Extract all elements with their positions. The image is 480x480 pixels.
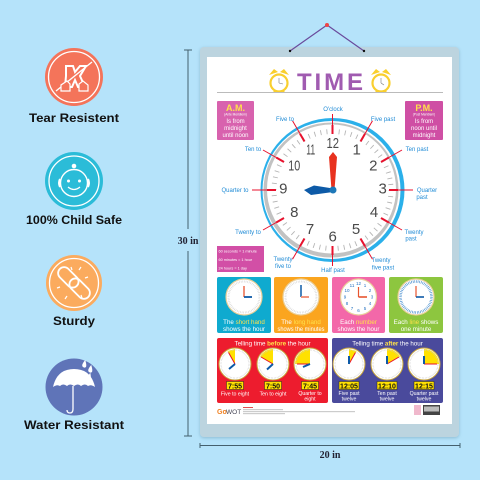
panel: A.M.: midnight (224, 126, 247, 132)
clock labels: Ten past (406, 147, 429, 153)
panel: time conversions: 60 minutes = 1 hour (218, 258, 253, 262)
card: each line: one minute (401, 326, 432, 333)
footer: logo and imprint: Go (217, 409, 227, 416)
panel: A.M.: (Ante Meridiem) (224, 112, 247, 116)
panel: telling time before the hour (217, 338, 328, 403)
clock labels: past (405, 236, 417, 242)
panel: P.M.: midnight (413, 133, 436, 139)
title: TIME (297, 69, 363, 96)
clock labels: Five past (371, 117, 396, 123)
card: each line (389, 277, 443, 333)
panel: time conversions: 24 hours = 1 day (218, 266, 247, 270)
clock labels: Half past (321, 268, 345, 274)
card: short hand: The short hand (223, 319, 265, 326)
clock 12:05 (333, 348, 365, 402)
hanging cord (289, 23, 365, 52)
clock 7:55: 7:55 (228, 383, 242, 390)
clock labels: Quarter to (221, 188, 249, 194)
card: each line: Each line shows (394, 319, 438, 326)
footer: qr and barcode (414, 405, 440, 415)
clock labels: Twenty (273, 257, 293, 263)
clock 12:05: twelve (342, 396, 356, 402)
dimension: width 20 in: 20 in (320, 450, 341, 461)
icon: sturdy (46, 255, 102, 311)
icon: child safe (45, 152, 103, 210)
panel: A.M.: Is from (226, 119, 245, 125)
minute hand (329, 152, 337, 190)
panel: telling time after the hour (332, 338, 443, 403)
clock labels: five past (372, 266, 394, 272)
clock labels: Twenty to (235, 230, 261, 236)
main clock (252, 114, 413, 266)
clock 7:45 (294, 348, 326, 402)
clock 7:55: Five to eight (221, 392, 250, 398)
panel: A.M.: A.M. (226, 103, 245, 113)
card: each number: 6 (357, 308, 360, 313)
card: each number: 9 (344, 294, 347, 300)
panel: A.M.: until noon (222, 133, 249, 139)
clock numerals: 1 (353, 142, 361, 158)
clock 12:10 (371, 348, 403, 402)
label: tear resistent: Tear Resistent (29, 111, 119, 125)
clock numerals: 2 (369, 158, 377, 174)
clock numerals: 8 (290, 204, 298, 221)
clock numerals: 5 (352, 221, 360, 238)
card: short hand (217, 277, 271, 333)
clock labels: Five to (276, 117, 295, 123)
clock 12:05: 12:05 (340, 383, 358, 390)
card: long hand (274, 277, 328, 333)
red hour marks (252, 114, 413, 266)
dimension: height 30 in (178, 50, 199, 436)
clock 12:15 (408, 348, 440, 402)
card: each number: 12 (356, 281, 361, 286)
pivot (330, 186, 336, 194)
clock numerals: 7 (306, 221, 314, 238)
panel: P.M.: noon until (411, 126, 437, 132)
hour hand (304, 186, 333, 195)
label: child safe: 100% Child Safe (26, 213, 122, 227)
label: water resistant: Water Resistant (24, 418, 124, 432)
card: each number: 10 (344, 288, 350, 293)
card: each number: Each number (340, 319, 377, 326)
clock 7:50 (257, 348, 289, 398)
clock 12:10: Ten past (377, 391, 397, 397)
clock numerals: 11 (306, 142, 315, 158)
card: each number: 7 (351, 306, 354, 311)
clock labels: past (416, 195, 428, 201)
icon: water resistant (46, 358, 102, 416)
card: long hand: The long hand (281, 319, 321, 326)
clock numerals: 3 (379, 181, 387, 198)
card: each number: 4 (369, 301, 372, 306)
panel: telling time before the hour: Telling time before the hour (234, 340, 311, 348)
card: each number: 5 (364, 306, 367, 311)
clock 7:55 (219, 348, 251, 398)
footer: logo and imprint: WOT (226, 409, 241, 416)
clock numerals: 4 (370, 204, 378, 221)
panel: P.M.: P.M. (415, 103, 433, 113)
dimension: height 30 in: 30 in (178, 236, 199, 247)
clock 12:05: Five past (338, 391, 360, 397)
poster frame (200, 47, 459, 437)
clock labels: O'clock (323, 107, 344, 113)
card: each number: 11 (350, 283, 355, 288)
clock numerals (279, 135, 387, 246)
clock labels: five to (275, 264, 292, 270)
panel: time conversions: 60 seconds = 1 minute (218, 250, 257, 254)
clock numerals: 9 (279, 181, 287, 198)
card: each number: 2 (369, 288, 372, 293)
clock 7:45: Quarter to (298, 391, 322, 397)
panel: P.M. (405, 101, 443, 140)
clock numerals: 10 (288, 158, 300, 174)
card: short hand: shows the hour (223, 326, 265, 333)
clock labels: Quarter (417, 188, 437, 194)
clock labels: Twenty (371, 258, 391, 264)
panel: P.M.: (Post Meridiem) (413, 112, 435, 116)
panel: P.M.: Is from (415, 119, 433, 125)
clock 7:50: Ten to eight (260, 392, 287, 398)
panel: time conversions (217, 246, 264, 272)
clock labels: Ten to (245, 147, 262, 153)
card: long hand: shows the minutes (278, 326, 324, 333)
icon: tear resistant (45, 48, 103, 106)
clock numerals: 6 (329, 228, 337, 246)
card: each number (332, 277, 385, 333)
clock 12:15: 12:15 (415, 383, 433, 390)
clock labels (221, 107, 437, 274)
clock 12:15: twelve (417, 396, 431, 402)
card: each number: 3 (371, 294, 374, 300)
title (217, 69, 443, 96)
dimension: width 20 in (200, 443, 460, 461)
icon: right alarm clock (371, 69, 391, 92)
clock labels: Twenty (404, 230, 424, 236)
clock 7:45: 7:45 (303, 383, 317, 390)
clock 12:15: Quarter past (410, 391, 439, 397)
icon: left alarm clock (269, 69, 289, 92)
clock 12:10: 12:10 (378, 383, 396, 390)
panel: telling time after the hour: Telling time after the hour (352, 340, 423, 348)
clock numerals: 12 (326, 135, 339, 152)
clock 7:50: 7:50 (266, 383, 280, 390)
footer: logo and imprint (217, 407, 355, 416)
card: each number: shows the hour (338, 326, 379, 333)
card: each number: 8 (346, 301, 349, 306)
clock 12:10: twelve (380, 396, 394, 402)
clock 7:45: eight (304, 396, 316, 402)
panel: A.M. (217, 101, 254, 140)
label: sturdy: Sturdy (53, 314, 95, 328)
card: each number: 1 (364, 283, 367, 288)
